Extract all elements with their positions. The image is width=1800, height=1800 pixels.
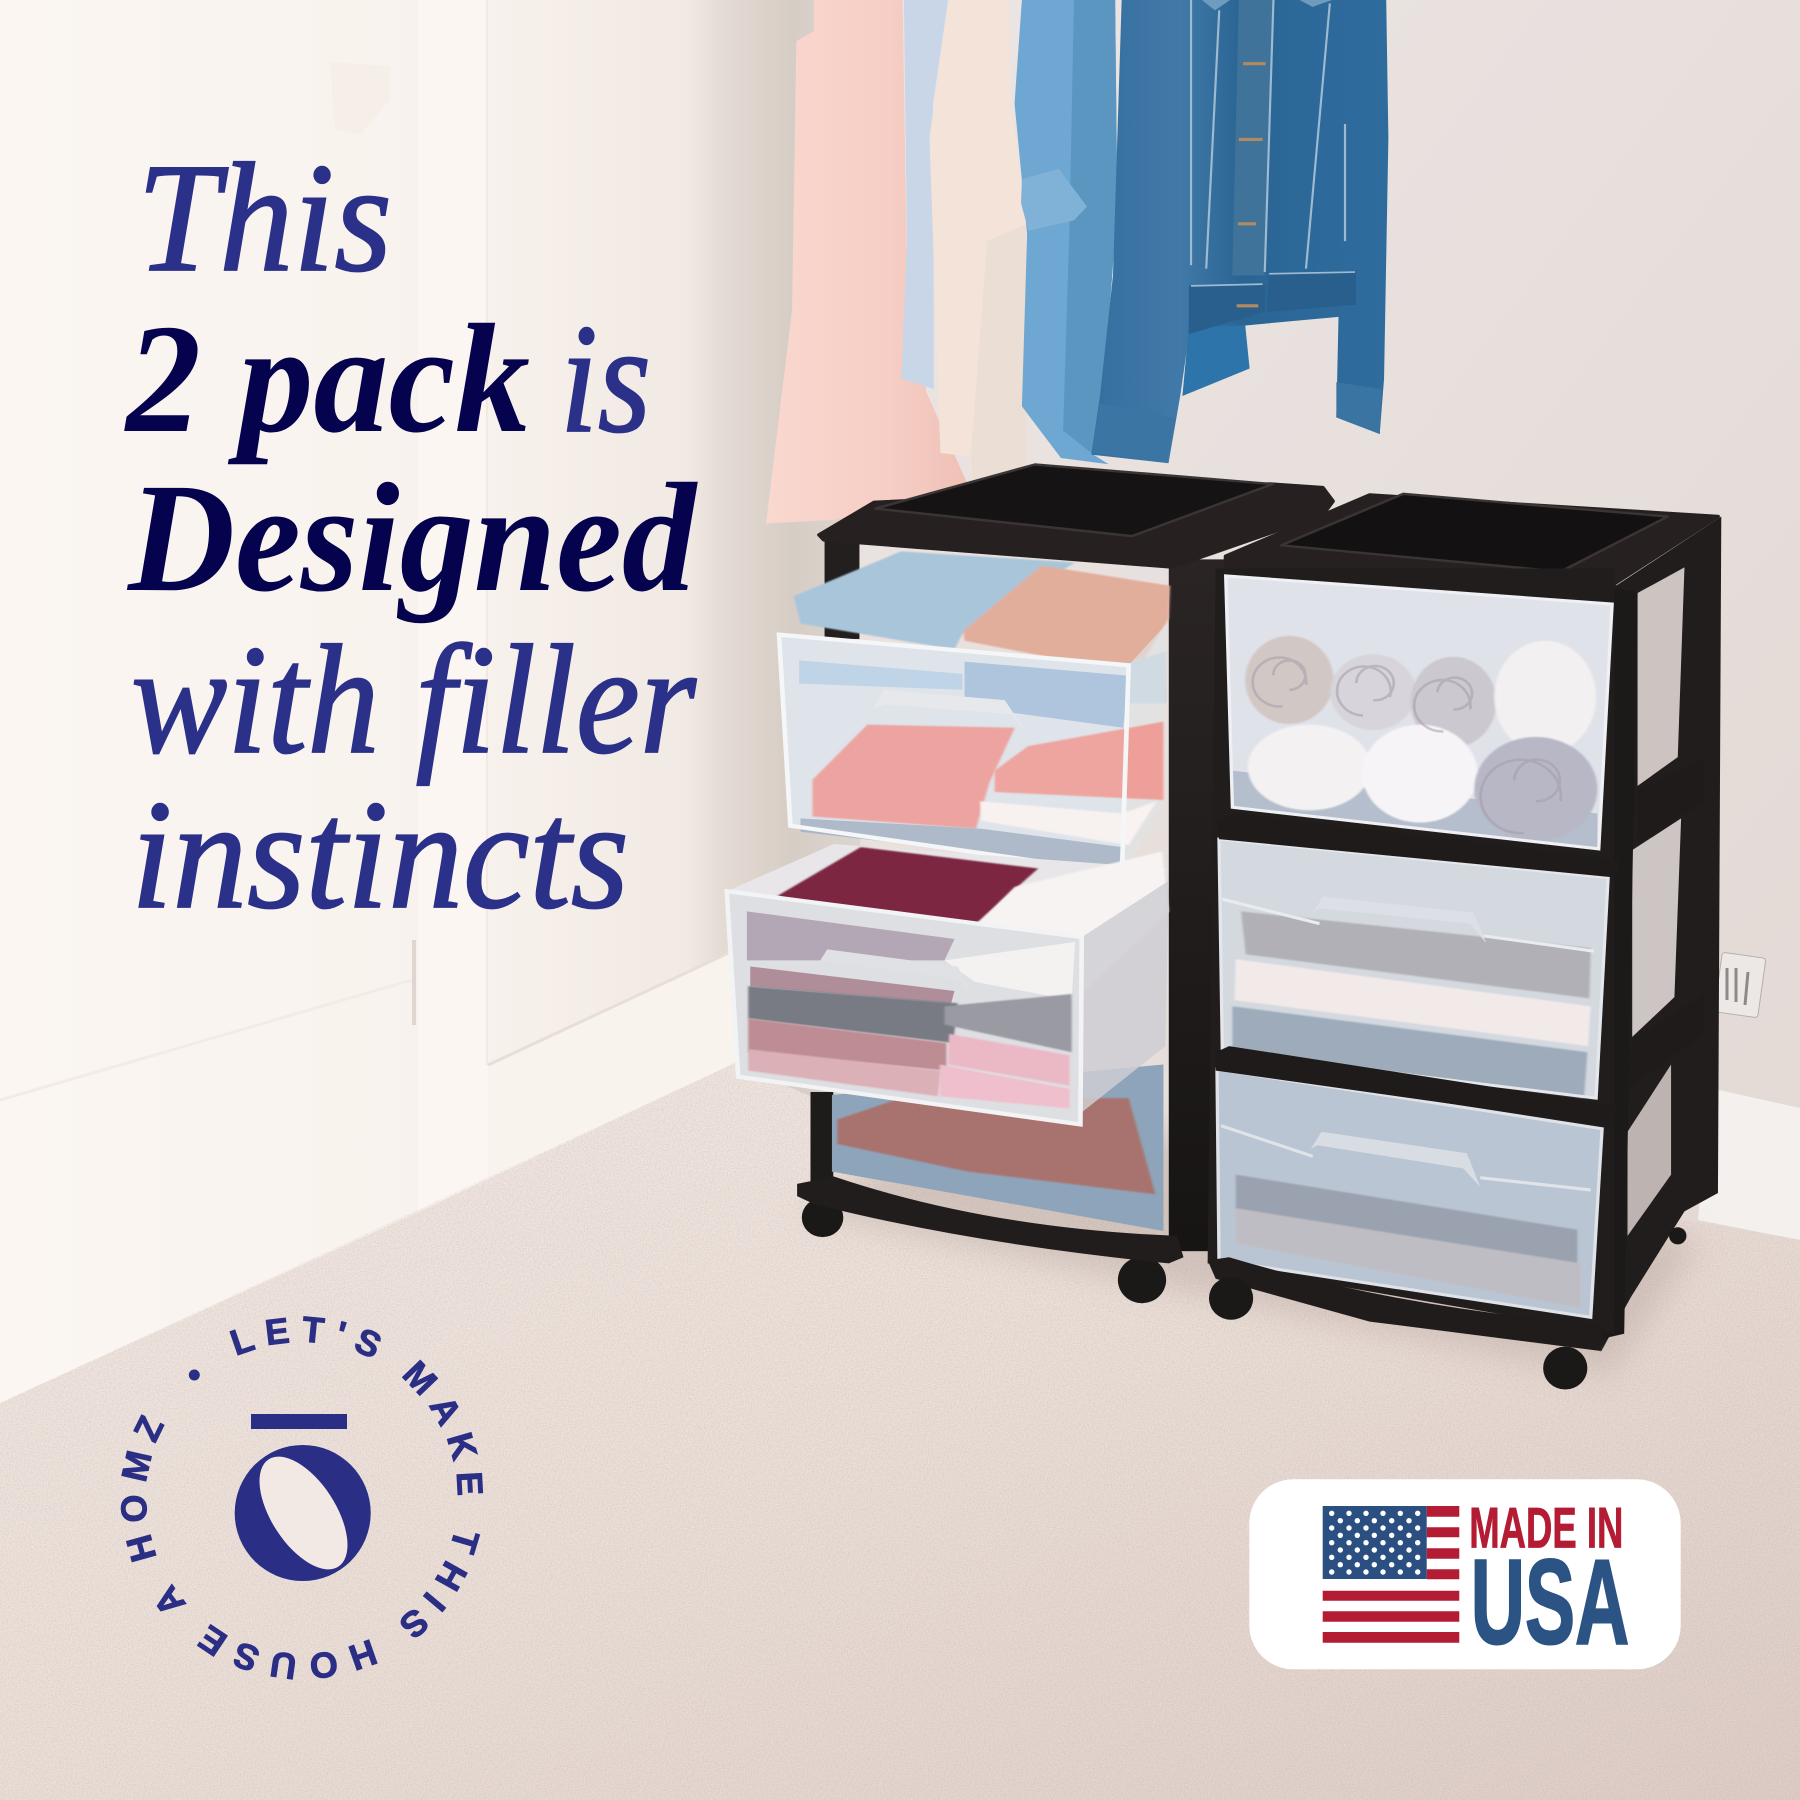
pale blue shirt (901, 0, 948, 389)
wall fittings (330, 62, 1766, 1018)
drawer handle (1313, 897, 1486, 943)
cream cardigan (930, 0, 1026, 506)
line: This: This (137, 131, 392, 304)
tray (1281, 494, 1668, 572)
carpet (0, 1060, 1800, 1800)
white badge background (1249, 1479, 1681, 1669)
line: with filler: with filler (131, 613, 697, 786)
lower pulled-out drawer (727, 844, 1169, 1124)
made in text: MADE IN (1469, 1496, 1623, 1560)
drawer handle (873, 690, 1028, 735)
top plate (819, 484, 1333, 567)
drawer 2 with folded towels (1219, 839, 1608, 1098)
us flag (1323, 1506, 1459, 1643)
brand badge (120, 1316, 484, 1680)
horizontal rails (1208, 758, 1705, 1351)
folded clothes on top shelf (794, 551, 1170, 703)
hanging clothes (766, 0, 1388, 523)
pink dress (766, 0, 970, 523)
blue shirt (1015, 0, 1117, 464)
denim jacket (1091, 0, 1388, 463)
line: instincts: instincts (131, 768, 629, 941)
headline (124, 131, 698, 941)
bottom drawer (closed) (832, 1064, 1163, 1231)
circular slogan: LET'S MAKE THIS HOUSE A HOMZ (120, 1316, 484, 1680)
front post (1597, 587, 1638, 1340)
drawer units (727, 464, 1721, 1390)
frame: rear post, front post and wheels (802, 538, 1226, 1303)
drawer 3 with folded towels (1217, 1069, 1602, 1317)
line: Designed: Designed (126, 451, 698, 624)
drawer 1 with rolled towels (1226, 576, 1612, 849)
drawer handle (1311, 1132, 1480, 1187)
wheels (1209, 1277, 1587, 1390)
right drawer unit (1208, 494, 1721, 1390)
left drawer unit (727, 464, 1333, 1303)
logo bar (251, 1414, 347, 1429)
line: 2 pack is: is (560, 292, 651, 465)
drawer handle (1321, 635, 1494, 668)
separator dot (189, 1370, 200, 1380)
bottom rail (797, 1176, 1184, 1263)
body back (1208, 569, 1614, 1334)
door and skirting (0, 0, 1800, 1240)
tray (875, 464, 1273, 536)
drawer handle (817, 949, 976, 1002)
top frame (1226, 495, 1718, 600)
made in usa badge (1249, 1479, 1681, 1669)
top pulled-out drawer (779, 624, 1167, 873)
logo ring (235, 1442, 371, 1584)
usa text: USA (1471, 1533, 1629, 1669)
line: 2 pack is: 2 pack (124, 292, 530, 465)
rear post and side panels (1601, 517, 1721, 1352)
